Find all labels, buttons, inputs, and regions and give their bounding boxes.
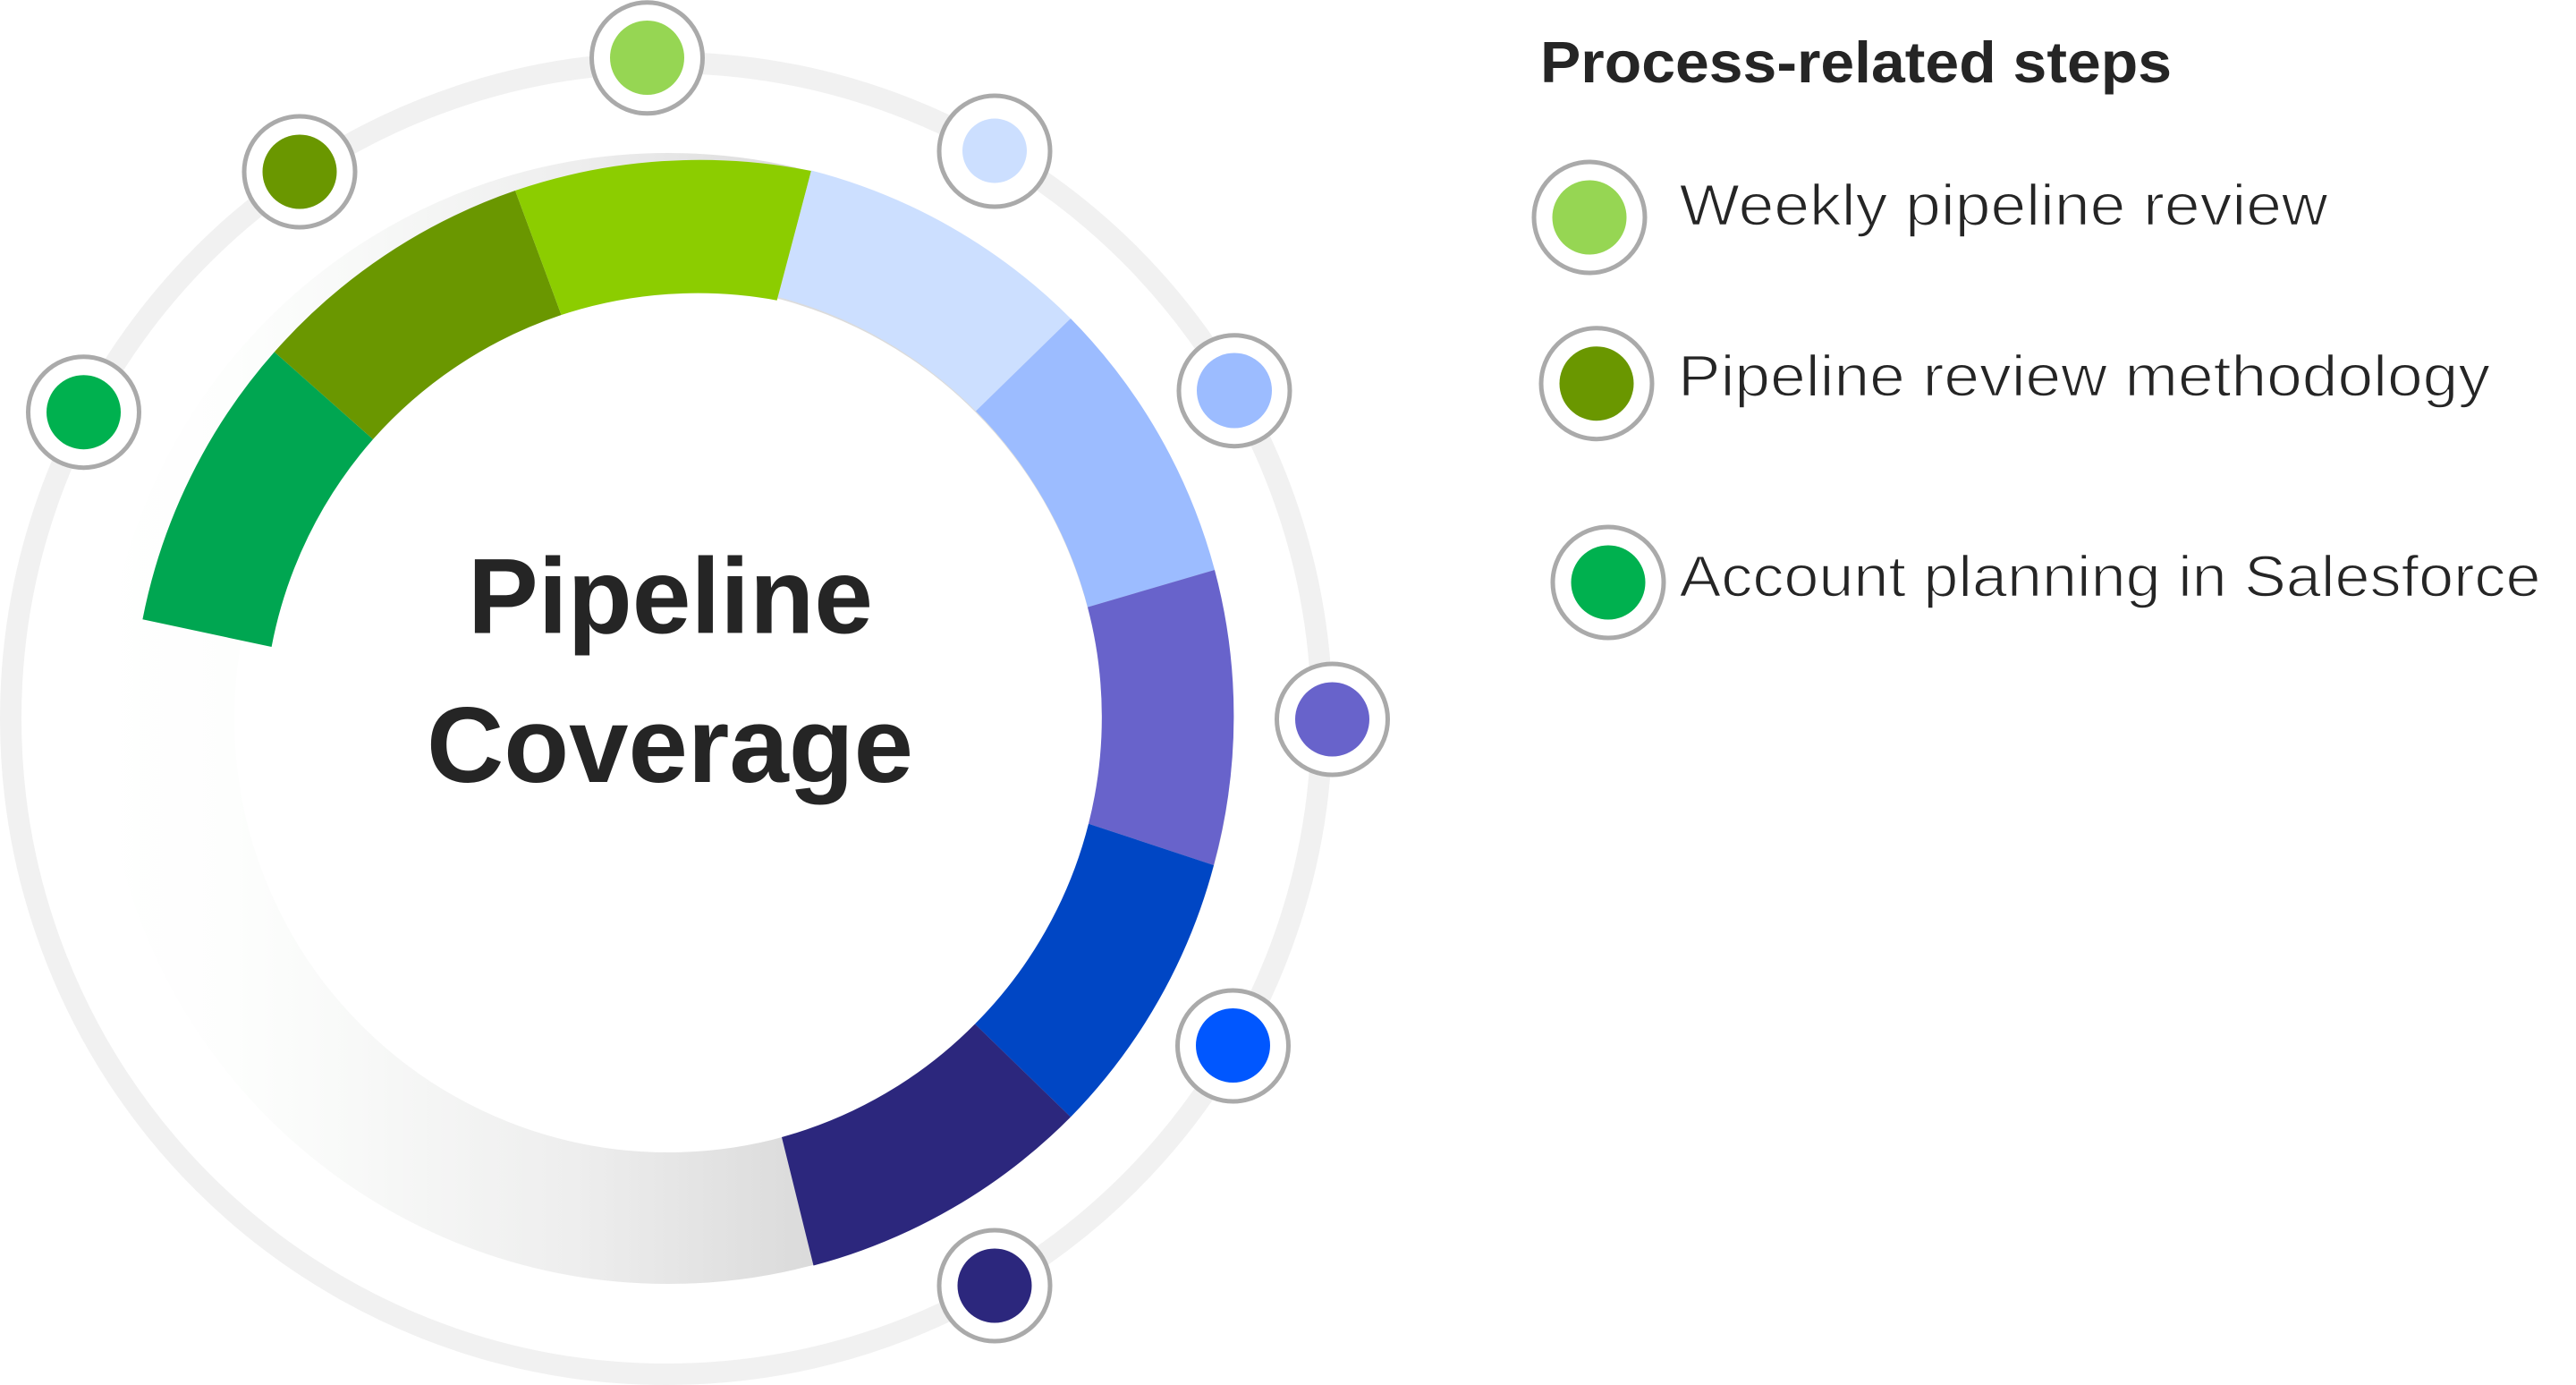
node: light blue (1179, 336, 1290, 446)
center title: Pipeline (468, 537, 873, 657)
segment: royal blue (975, 824, 1214, 1117)
legend marker: emerald (1553, 527, 1664, 638)
segment: navy (782, 1024, 1071, 1265)
legend item: account planning in salesforce (1553, 527, 2540, 638)
node: navy (939, 1230, 1050, 1341)
node: emerald (29, 357, 140, 468)
legend heading: Process-related steps (1540, 30, 2172, 95)
legend label: Weekly pipeline review (1680, 172, 2329, 238)
legend label: Pipeline review methodology (1678, 344, 2491, 409)
donut chart segments (142, 160, 1233, 1265)
legend item: pipeline review methodology (1541, 328, 2491, 439)
legend label: Account planning in Salesforce (1680, 544, 2540, 608)
outer track ring (11, 63, 1322, 1374)
legend marker: olive (1541, 328, 1652, 439)
legend marker: light green (1534, 162, 1645, 273)
segment: light blue (976, 319, 1215, 608)
node: olive (244, 116, 355, 227)
segment: emerald green (142, 352, 373, 647)
segment: pale blue (778, 170, 1071, 412)
node: violet (1277, 664, 1388, 775)
center title: Coverage (427, 685, 913, 805)
segment: olive green (275, 191, 562, 439)
node: light green (592, 3, 703, 114)
node: bright blue (1177, 990, 1288, 1101)
faded grey base ring (168, 218, 1168, 1219)
segment: lime green (515, 160, 811, 315)
segment: violet (1088, 570, 1233, 865)
node: pale blue (939, 96, 1050, 207)
center title (427, 537, 913, 805)
legend item: weekly pipeline review (1534, 162, 2329, 273)
